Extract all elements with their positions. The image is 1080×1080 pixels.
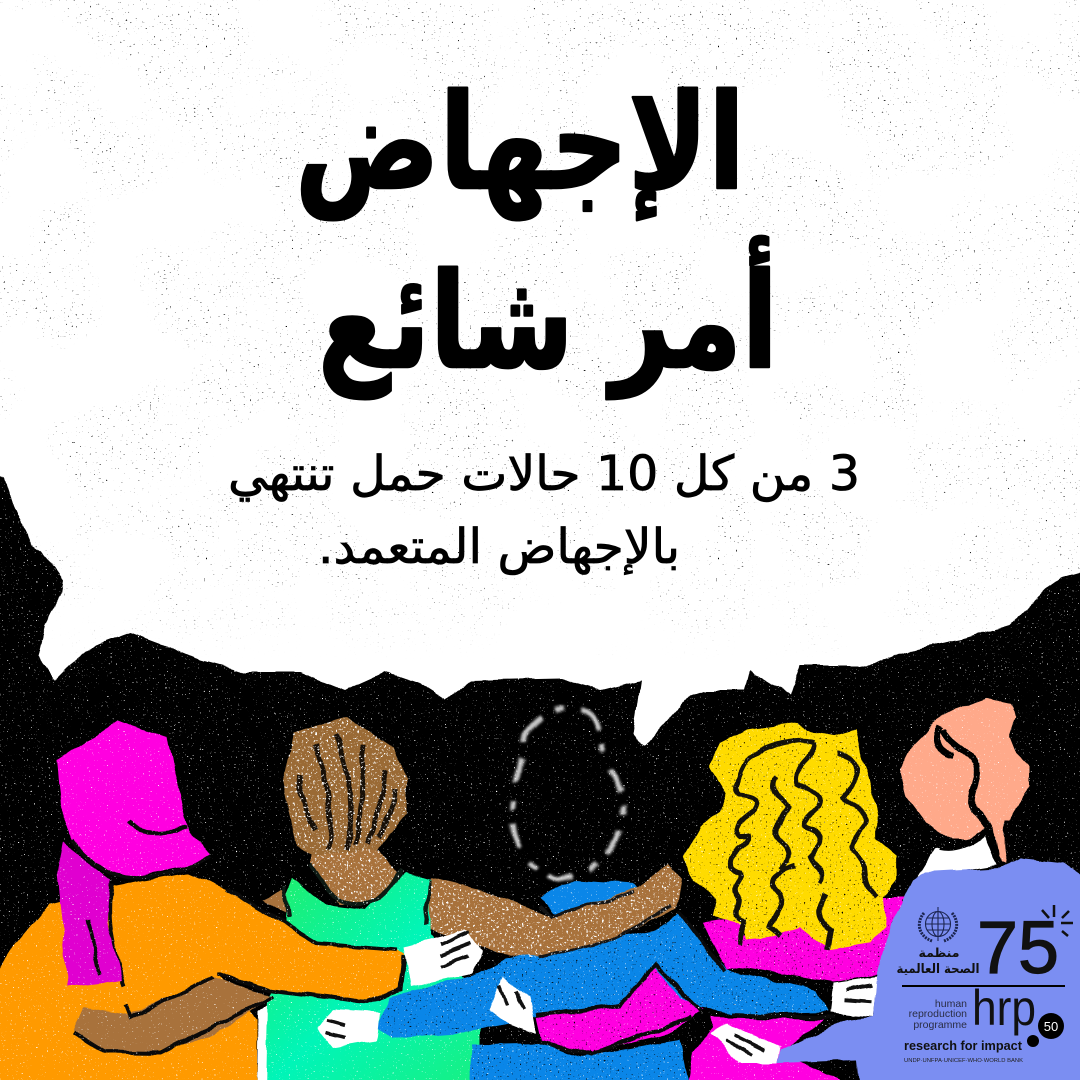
brown arm around back (73, 977, 273, 1053)
blue body (377, 913, 828, 1038)
neck and shoulders (310, 850, 400, 904)
hrp programme name: human (935, 998, 967, 1010)
peach hair (900, 698, 1030, 863)
hrp wordmark: hrp (972, 980, 1036, 1036)
chalk flecks (0, 470, 1080, 1080)
white gap beside green top (257, 1005, 268, 1080)
figure: woman with braids in green top (263, 717, 480, 1080)
figure: woman with curly blonde hair (683, 723, 912, 1080)
hrp programme name: reproduction (909, 1008, 967, 1020)
white chalk on brown hair and arm (280, 710, 690, 960)
black grit on coloured clothing and blonde hair (370, 720, 930, 1080)
magenta top (703, 897, 912, 982)
periwinkle body behind logos (777, 858, 1080, 1080)
75 anniversary numeral: 75 (977, 906, 1059, 989)
WHO arabic name: منظمة (919, 945, 959, 960)
figure: woman with peach hair in periwinkle top, white collar (900, 698, 1030, 876)
hrp programme name (909, 998, 967, 1031)
hands (317, 930, 877, 1063)
subtitle (228, 446, 860, 575)
black chalk mass (0, 472, 1080, 1080)
collar line (283, 862, 430, 925)
finger lines (327, 932, 872, 1055)
title (295, 66, 778, 399)
icon: WHO emblem (919, 907, 957, 941)
headscarf tail (57, 843, 123, 987)
hair chalk outline (512, 708, 625, 880)
braid lines (300, 735, 395, 850)
arm outlines (73, 885, 404, 1053)
figure: woman in orange with magenta headscarf (0, 720, 404, 1080)
hrp dot (1027, 1035, 1039, 1047)
headscarf (57, 720, 212, 877)
hand on blue (317, 1010, 380, 1047)
hrp programme name: programme (913, 1019, 967, 1031)
lower magenta (687, 1017, 860, 1080)
white collar (918, 836, 997, 876)
subtitle line 2: بالإجهاض المتعمد. (318, 519, 680, 575)
head with braids (283, 717, 407, 855)
cosponsors: UNDP·UNFPA·UNICEF·WHO·WORLD BANK (904, 1058, 1024, 1064)
blue figure outlines (537, 910, 835, 1055)
blue lower back (470, 1040, 690, 1080)
curls (730, 741, 877, 950)
hrp 50 badge: 50 (1044, 1019, 1058, 1034)
subtitle line 1: 3 من كل 10 حالات حمل تنتهي (228, 446, 860, 502)
yellow hair (683, 723, 897, 950)
logo block (896, 905, 1073, 1064)
green top (264, 872, 480, 1080)
blue collar (540, 880, 640, 915)
hair line (937, 727, 1013, 868)
brown arm across shoulders (430, 862, 682, 958)
speckle texture (0, 0, 1080, 660)
headscarf folds (72, 822, 212, 975)
title line 2: أمر شائع (318, 236, 778, 399)
magenta inner back (537, 967, 702, 1053)
icon: sparkle rays (1042, 905, 1073, 936)
hrp 50 badge (1038, 1013, 1064, 1039)
orange top (0, 873, 404, 1080)
WHO arabic name line 2: الصحة العالمية (896, 962, 980, 977)
hand bottom right (710, 1023, 780, 1063)
arm outline (537, 892, 672, 958)
title line 1: الإجهاض (295, 66, 745, 221)
hand on green top (403, 930, 483, 987)
hand right (830, 977, 877, 1017)
divider (902, 985, 1065, 987)
research for impact: research for impact (904, 1039, 1023, 1053)
left shoulder (263, 887, 287, 915)
hand at left back (490, 977, 537, 1033)
figure: woman with black hair in blue top (377, 708, 835, 1080)
illustration: women embracing on chalk background (0, 472, 1080, 1080)
